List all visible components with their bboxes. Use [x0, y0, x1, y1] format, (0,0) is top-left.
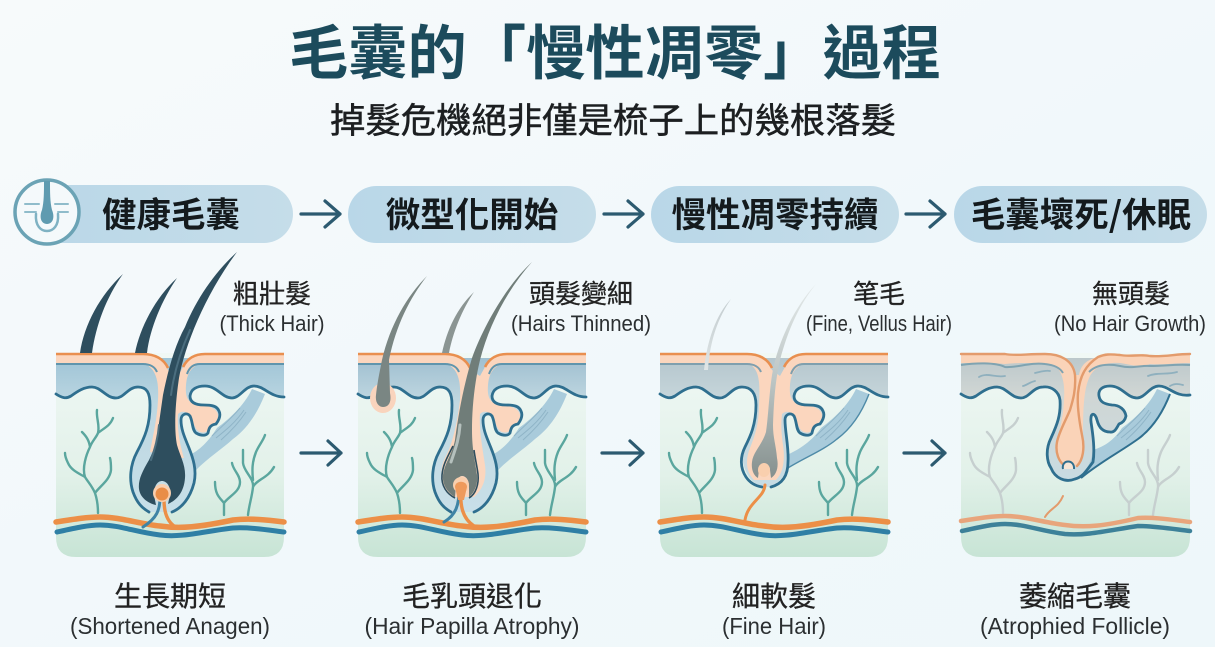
label: hairs thinned: (Hairs Thinned) [511, 311, 651, 336]
outline of follicle and gland [660, 386, 888, 487]
papilla vessels [143, 497, 160, 527]
withered vessel stub [1045, 496, 1063, 517]
label: hairs thinned: 頭髮變細 [529, 274, 633, 311]
panel: vellus follicle [660, 284, 888, 557]
epidermis band and follicle sheath [961, 358, 1190, 480]
label: vellus hair: 笔毛 [853, 274, 905, 311]
caption: atrophied follicle [980, 575, 1170, 639]
peach epidermis band [961, 354, 1190, 466]
arrow: panel 1 to 2 [301, 441, 341, 465]
icon: hair follicle badge [15, 180, 79, 244]
arrow: stage 3 to 4 [906, 201, 945, 227]
vascular vessels [660, 517, 888, 536]
caption: fine hair: 細軟髮 [732, 575, 816, 615]
receding hair with shallow bulb [370, 276, 427, 413]
shrunken papilla [1063, 462, 1074, 469]
caption: atrophied follicle: 萎縮毛囊 [1019, 575, 1131, 615]
caption: atrophied follicle: (Atrophied Follicle) [980, 613, 1170, 639]
arrow: panel 2 to 3 [602, 441, 643, 465]
skin surface line [56, 354, 284, 368]
peach skin layer and inner sheath [56, 355, 284, 458]
capillaries left [367, 410, 415, 513]
stage pill: miniaturization begins: 微型化開始 [386, 187, 558, 237]
dermal papilla [453, 477, 469, 500]
arrow: stage 2 to 3 [604, 201, 643, 227]
capillaries right [517, 435, 576, 515]
capillaries left faded [970, 410, 1018, 513]
label: thick hair: (Thick Hair) [220, 311, 324, 336]
short hair left [80, 274, 123, 353]
outline of follicle and gland [56, 386, 284, 512]
thick terminal hair [139, 252, 237, 505]
outline of follicle and gland [358, 386, 586, 512]
vascular vessels faded [961, 516, 1190, 534]
title: 毛囊的「慢性凋零」過程 [289, 6, 941, 91]
caption: shortened anagen: 生長期短 [114, 575, 226, 615]
stage pill: follicle death or dormancy: 毛囊壞死/休眠 [971, 187, 1191, 237]
caption: fine hair [722, 575, 826, 639]
dermis background [56, 353, 284, 557]
arrow: panel 3 to 4 [904, 441, 945, 465]
label: thick hair: 粗壯髮 [233, 274, 311, 311]
stage pill: miniaturization begins [348, 186, 596, 243]
hair highlights [151, 330, 190, 460]
arrow: stage 1 to 2 [301, 201, 340, 227]
faded hair [704, 299, 731, 370]
arrector pili muscle [787, 389, 869, 468]
dermis background [358, 353, 586, 557]
follicle bulb outline [442, 446, 478, 498]
stage pill: chronic withering continues: 慢性凋零持續 [672, 187, 878, 237]
basal line [961, 363, 1190, 373]
panel: thinning follicle [358, 262, 586, 557]
peach skin layer and inner sheath [358, 355, 586, 497]
subtitle: 掉髮危機絕非僅是梳子上的幾根落髮 [330, 93, 896, 144]
hair highlight [451, 425, 460, 462]
vascular vessels [56, 517, 284, 536]
basal line [358, 364, 586, 374]
dermis background [961, 353, 1190, 557]
stage pill: healthy follicle [20, 185, 293, 243]
basal line [660, 364, 888, 374]
arrector pili muscle [188, 389, 265, 470]
capillaries right [215, 435, 274, 515]
label: no hair growth: 無頭髮 [1092, 274, 1170, 311]
label: no hair growth [1054, 274, 1206, 336]
label: thick hair [220, 274, 324, 336]
caption: shortened anagen: (Shortened Anagen) [70, 613, 270, 639]
caption: hair papilla atrophy: 毛乳頭退化 [402, 575, 542, 615]
dermal papilla [153, 484, 171, 502]
panel: atrophied follicle [961, 353, 1190, 557]
dermal papilla [758, 463, 770, 477]
caption: fine hair: (Fine Hair) [722, 613, 826, 639]
capillaries left [65, 410, 113, 513]
outline of follicle and gland [961, 386, 1190, 480]
arrector pili muscle [1081, 389, 1170, 478]
short fading hair [442, 292, 474, 353]
vascular vessels [358, 517, 586, 536]
short hair middle [135, 278, 177, 353]
capillaries right faded [1120, 435, 1179, 515]
capillaries left [669, 410, 717, 513]
papilla vessels [444, 490, 459, 522]
thinning hair [443, 262, 532, 497]
caption: hair papilla atrophy: (Hair Papilla Atrophy) [364, 613, 580, 639]
label: hairs thinned [511, 274, 651, 336]
epidermis band and follicle sheath [56, 358, 284, 512]
label: vellus hair [806, 274, 952, 336]
dermis background [660, 353, 888, 557]
caption: hair papilla atrophy [364, 575, 580, 639]
label: vellus hair: (Fine, Vellus Hair) [806, 311, 952, 336]
vellus hair [752, 284, 816, 478]
peach skin layer and inner sheath [660, 355, 888, 480]
capillaries right [819, 435, 878, 515]
panel: healthy follicle [56, 252, 284, 557]
papilla vessel [745, 485, 765, 520]
stage pill: healthy follicle: 健康毛囊 [102, 187, 240, 237]
basal line [56, 364, 284, 374]
keratin flecks [979, 371, 1183, 386]
arrector pili muscle [490, 389, 567, 470]
epidermis band and follicle sheath [358, 358, 586, 512]
caption: shortened anagen [70, 575, 270, 639]
skin surface line [660, 354, 888, 368]
epidermis band and follicle sheath [660, 358, 888, 487]
surface line [961, 354, 1190, 466]
skin surface line [358, 354, 586, 368]
